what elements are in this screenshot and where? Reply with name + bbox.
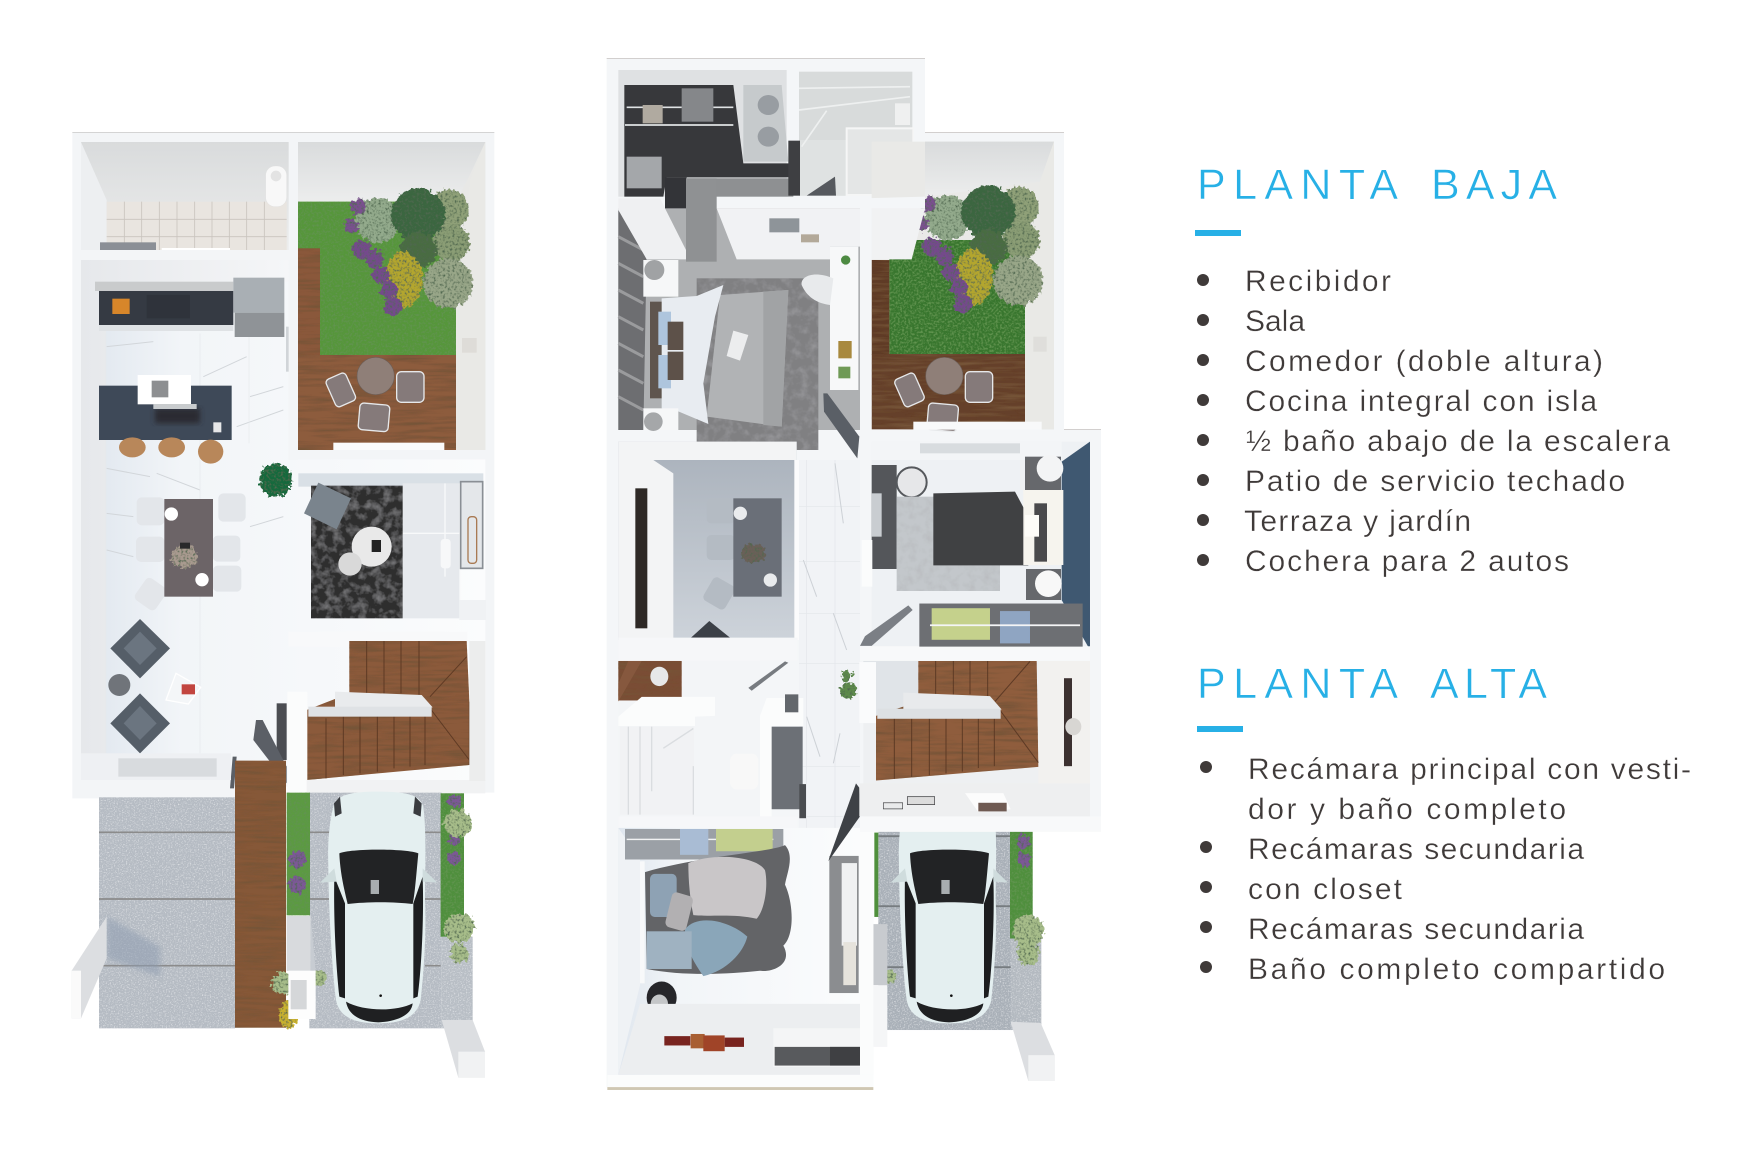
car — [320, 792, 437, 1023]
stair walls — [288, 632, 362, 647]
list: planta baja items: Cocina integral con isla — [1245, 385, 1597, 418]
planting strips — [272, 793, 474, 1029]
heading: planta alta — [1197, 660, 1547, 708]
list: planta baja items: ½ baño abajo de la escalera — [1246, 425, 1670, 458]
driveway below upper floor — [873, 829, 1055, 1081]
master bedroom — [872, 442, 1090, 650]
entry, seating and stairs — [72, 600, 486, 1078]
panel: planta alta text — [1197, 660, 1691, 986]
heading: planta alta: PLANTA — [1197, 660, 1398, 708]
list: planta baja items — [1244, 265, 1670, 578]
secondary bathroom — [618, 661, 788, 816]
secondary room: office — [618, 442, 799, 648]
master bathroom — [788, 72, 913, 196]
living room — [298, 473, 483, 618]
floor plan: planta baja — [72, 132, 494, 1078]
master bedroom lower part: closet — [860, 540, 1101, 831]
list: planta alta bullets — [1200, 761, 1212, 973]
list: planta alta items: Recámaras secundaria — [1248, 913, 1584, 946]
first bedroom with bath access — [618, 178, 860, 458]
list: planta alta items: Recámaras secundaria — [1248, 833, 1584, 866]
driveway — [99, 761, 473, 1028]
kitchen counter and fridge — [95, 278, 284, 337]
lower bedroom — [618, 783, 861, 1076]
upstairs hall — [799, 460, 860, 1010]
stub wall — [287, 692, 307, 797]
dining set — [133, 493, 246, 612]
armchairs — [108, 619, 201, 753]
list: planta alta items — [1248, 753, 1691, 986]
list: planta alta items: Recámara principal con vesti- — [1248, 753, 1691, 786]
list: planta alta items: dor y baño completo — [1248, 793, 1566, 826]
garden and terrace — [298, 142, 485, 451]
hall closet — [618, 694, 806, 828]
heading: planta baja: BAJA — [1431, 161, 1557, 209]
list: planta baja items: Comedor (doble altura) — [1245, 345, 1603, 378]
heading rule — [1195, 230, 1241, 236]
list: planta alta items: Baño completo compartido — [1248, 953, 1665, 986]
potted plant — [259, 463, 292, 497]
list: planta baja items: Recibidor — [1245, 265, 1391, 298]
office bottom wall — [618, 638, 798, 661]
exterior walls — [72, 132, 494, 798]
list: planta baja items: Terraza y jardín — [1244, 505, 1471, 538]
main living floor — [81, 260, 485, 780]
walk-in closet — [618, 70, 793, 261]
list: planta baja bullets — [1197, 274, 1209, 566]
car in garage — [891, 792, 1008, 1023]
list: planta baja items: Sala — [1245, 305, 1305, 338]
panel: planta baja text — [1195, 161, 1670, 578]
entry door — [81, 703, 287, 788]
heading: planta baja: PLANTA — [1197, 161, 1398, 209]
garden seen from above — [860, 142, 1054, 432]
stair room — [859, 661, 1101, 832]
exterior walls — [607, 58, 1101, 1087]
central wall — [860, 208, 872, 462]
list: planta alta items: con closet — [1248, 873, 1403, 906]
heading: planta baja — [1197, 161, 1557, 209]
heading: planta alta: ALTA — [1430, 660, 1547, 708]
service patio — [81, 142, 289, 250]
floor plan: planta alta — [607, 58, 1101, 1090]
walls around bottom bedroom — [860, 816, 873, 1089]
list: planta baja items: Patio de servicio techado — [1245, 465, 1625, 498]
heading rule — [1197, 726, 1243, 732]
stairs — [307, 641, 469, 780]
kitchen island — [99, 375, 232, 464]
list: planta baja items: Cochera para 2 autos — [1245, 545, 1569, 578]
low walls — [72, 916, 485, 1078]
